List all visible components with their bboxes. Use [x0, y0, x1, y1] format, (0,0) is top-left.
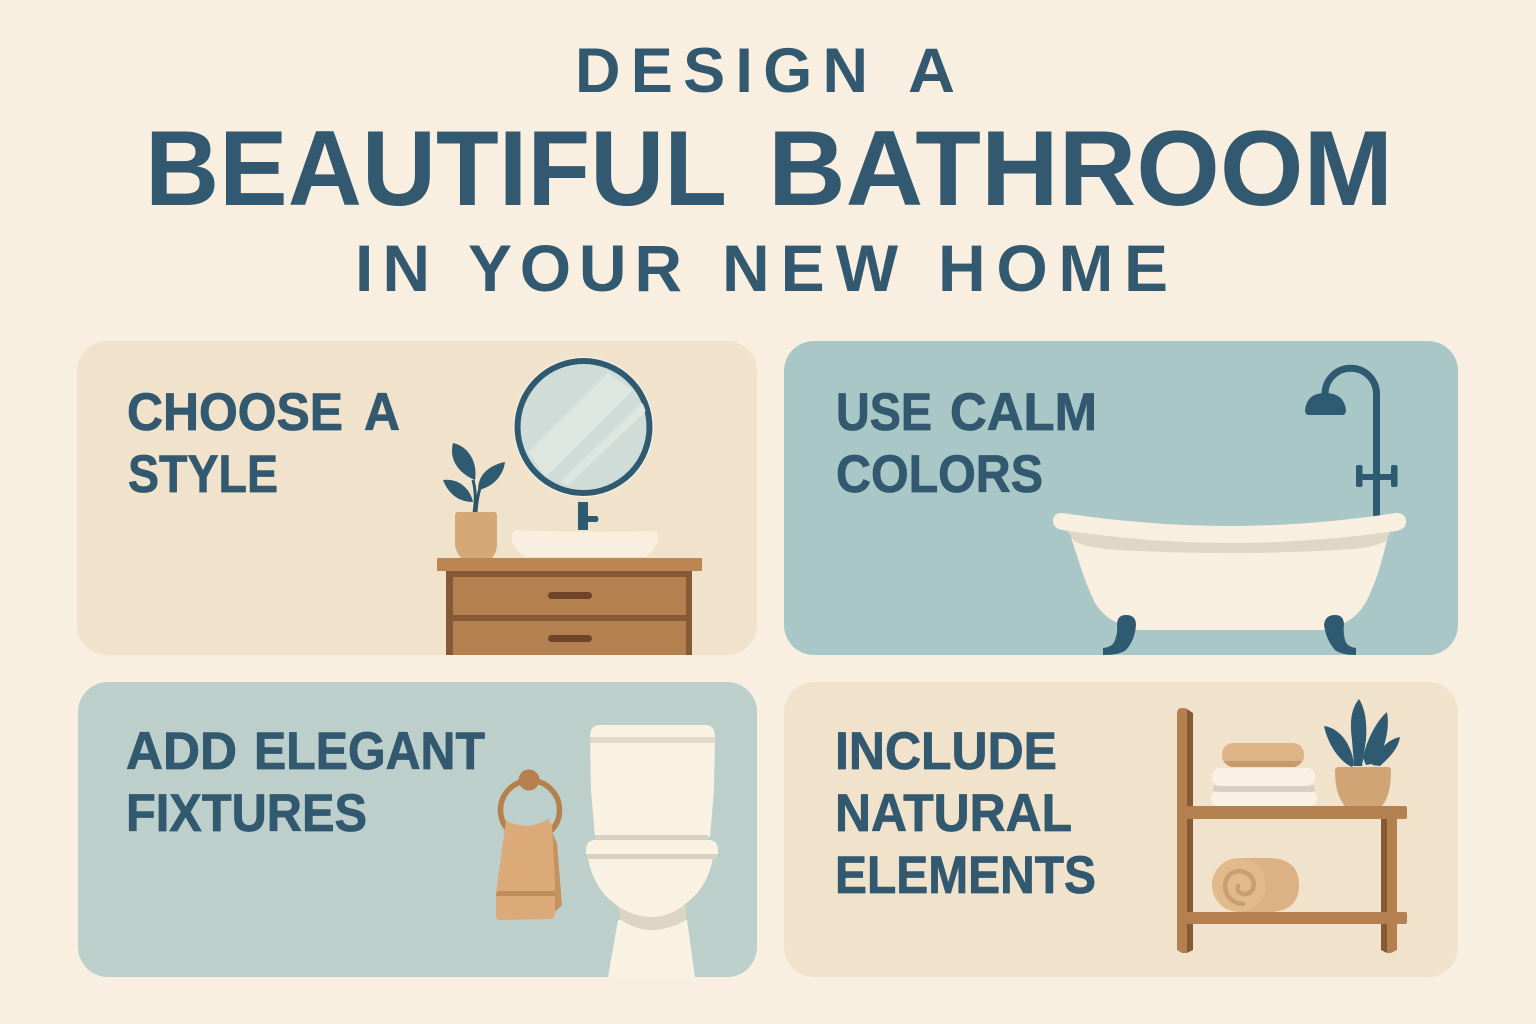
heading: choose a style — [127, 383, 400, 504]
icon: right tub foot — [1324, 615, 1356, 655]
icon: wooden shelf — [1177, 708, 1407, 953]
heading: use calm colors — [836, 383, 1097, 504]
title: BEAUTIFUL — [145, 108, 727, 228]
title — [145, 36, 1393, 305]
heading: choose a style: A — [364, 383, 400, 442]
panel: add elegant fixtures — [78, 682, 757, 977]
panel: use calm colors — [784, 341, 1458, 655]
icon: round mirror — [514, 357, 654, 497]
heading: include natural elements: NATURAL — [835, 784, 1072, 843]
heading: choose a style: CHOOSE — [127, 383, 343, 442]
title: A — [908, 36, 955, 106]
heading: use calm colors: CALM — [950, 383, 1097, 442]
title: HOME — [938, 231, 1168, 305]
panel: include natural elements — [784, 682, 1458, 977]
icon: vessel sink — [512, 530, 658, 557]
heading: include natural elements — [835, 722, 1096, 905]
heading: choose a style: STYLE — [128, 445, 278, 504]
icon: clawfoot bathtub — [1053, 513, 1406, 655]
heading: add elegant fixtures — [126, 722, 485, 843]
icon: towel ring — [500, 770, 560, 840]
heading: include natural elements: INCLUDE — [835, 722, 1057, 781]
icon: toilet — [586, 725, 718, 977]
heading: add elegant fixtures: ADD — [126, 722, 237, 781]
icon: left tub foot — [1103, 615, 1136, 655]
heading: add elegant fixtures: ELEGANT — [254, 722, 485, 781]
heading: include natural elements: ELEMENTS — [835, 846, 1096, 905]
icon: faucet — [578, 502, 598, 530]
heading: use calm colors: COLORS — [836, 445, 1043, 504]
icon: folded towels — [1211, 743, 1317, 806]
icon: potted plant — [443, 443, 505, 558]
heading: add elegant fixtures: FIXTURES — [126, 784, 367, 843]
icon: potted plant — [1324, 699, 1400, 806]
icon: hanging towel — [496, 819, 562, 920]
icon: rolled towel — [1212, 858, 1299, 912]
title: YOUR — [468, 231, 682, 305]
title: BATHROOM — [768, 108, 1393, 228]
title: NEW — [722, 231, 899, 305]
heading: use calm colors: USE — [836, 383, 932, 442]
title: DESIGN — [575, 36, 868, 106]
panel: choose a style — [77, 341, 757, 655]
title: IN — [355, 231, 430, 305]
icon: shower — [1305, 368, 1398, 517]
icon: wooden vanity — [437, 558, 702, 655]
